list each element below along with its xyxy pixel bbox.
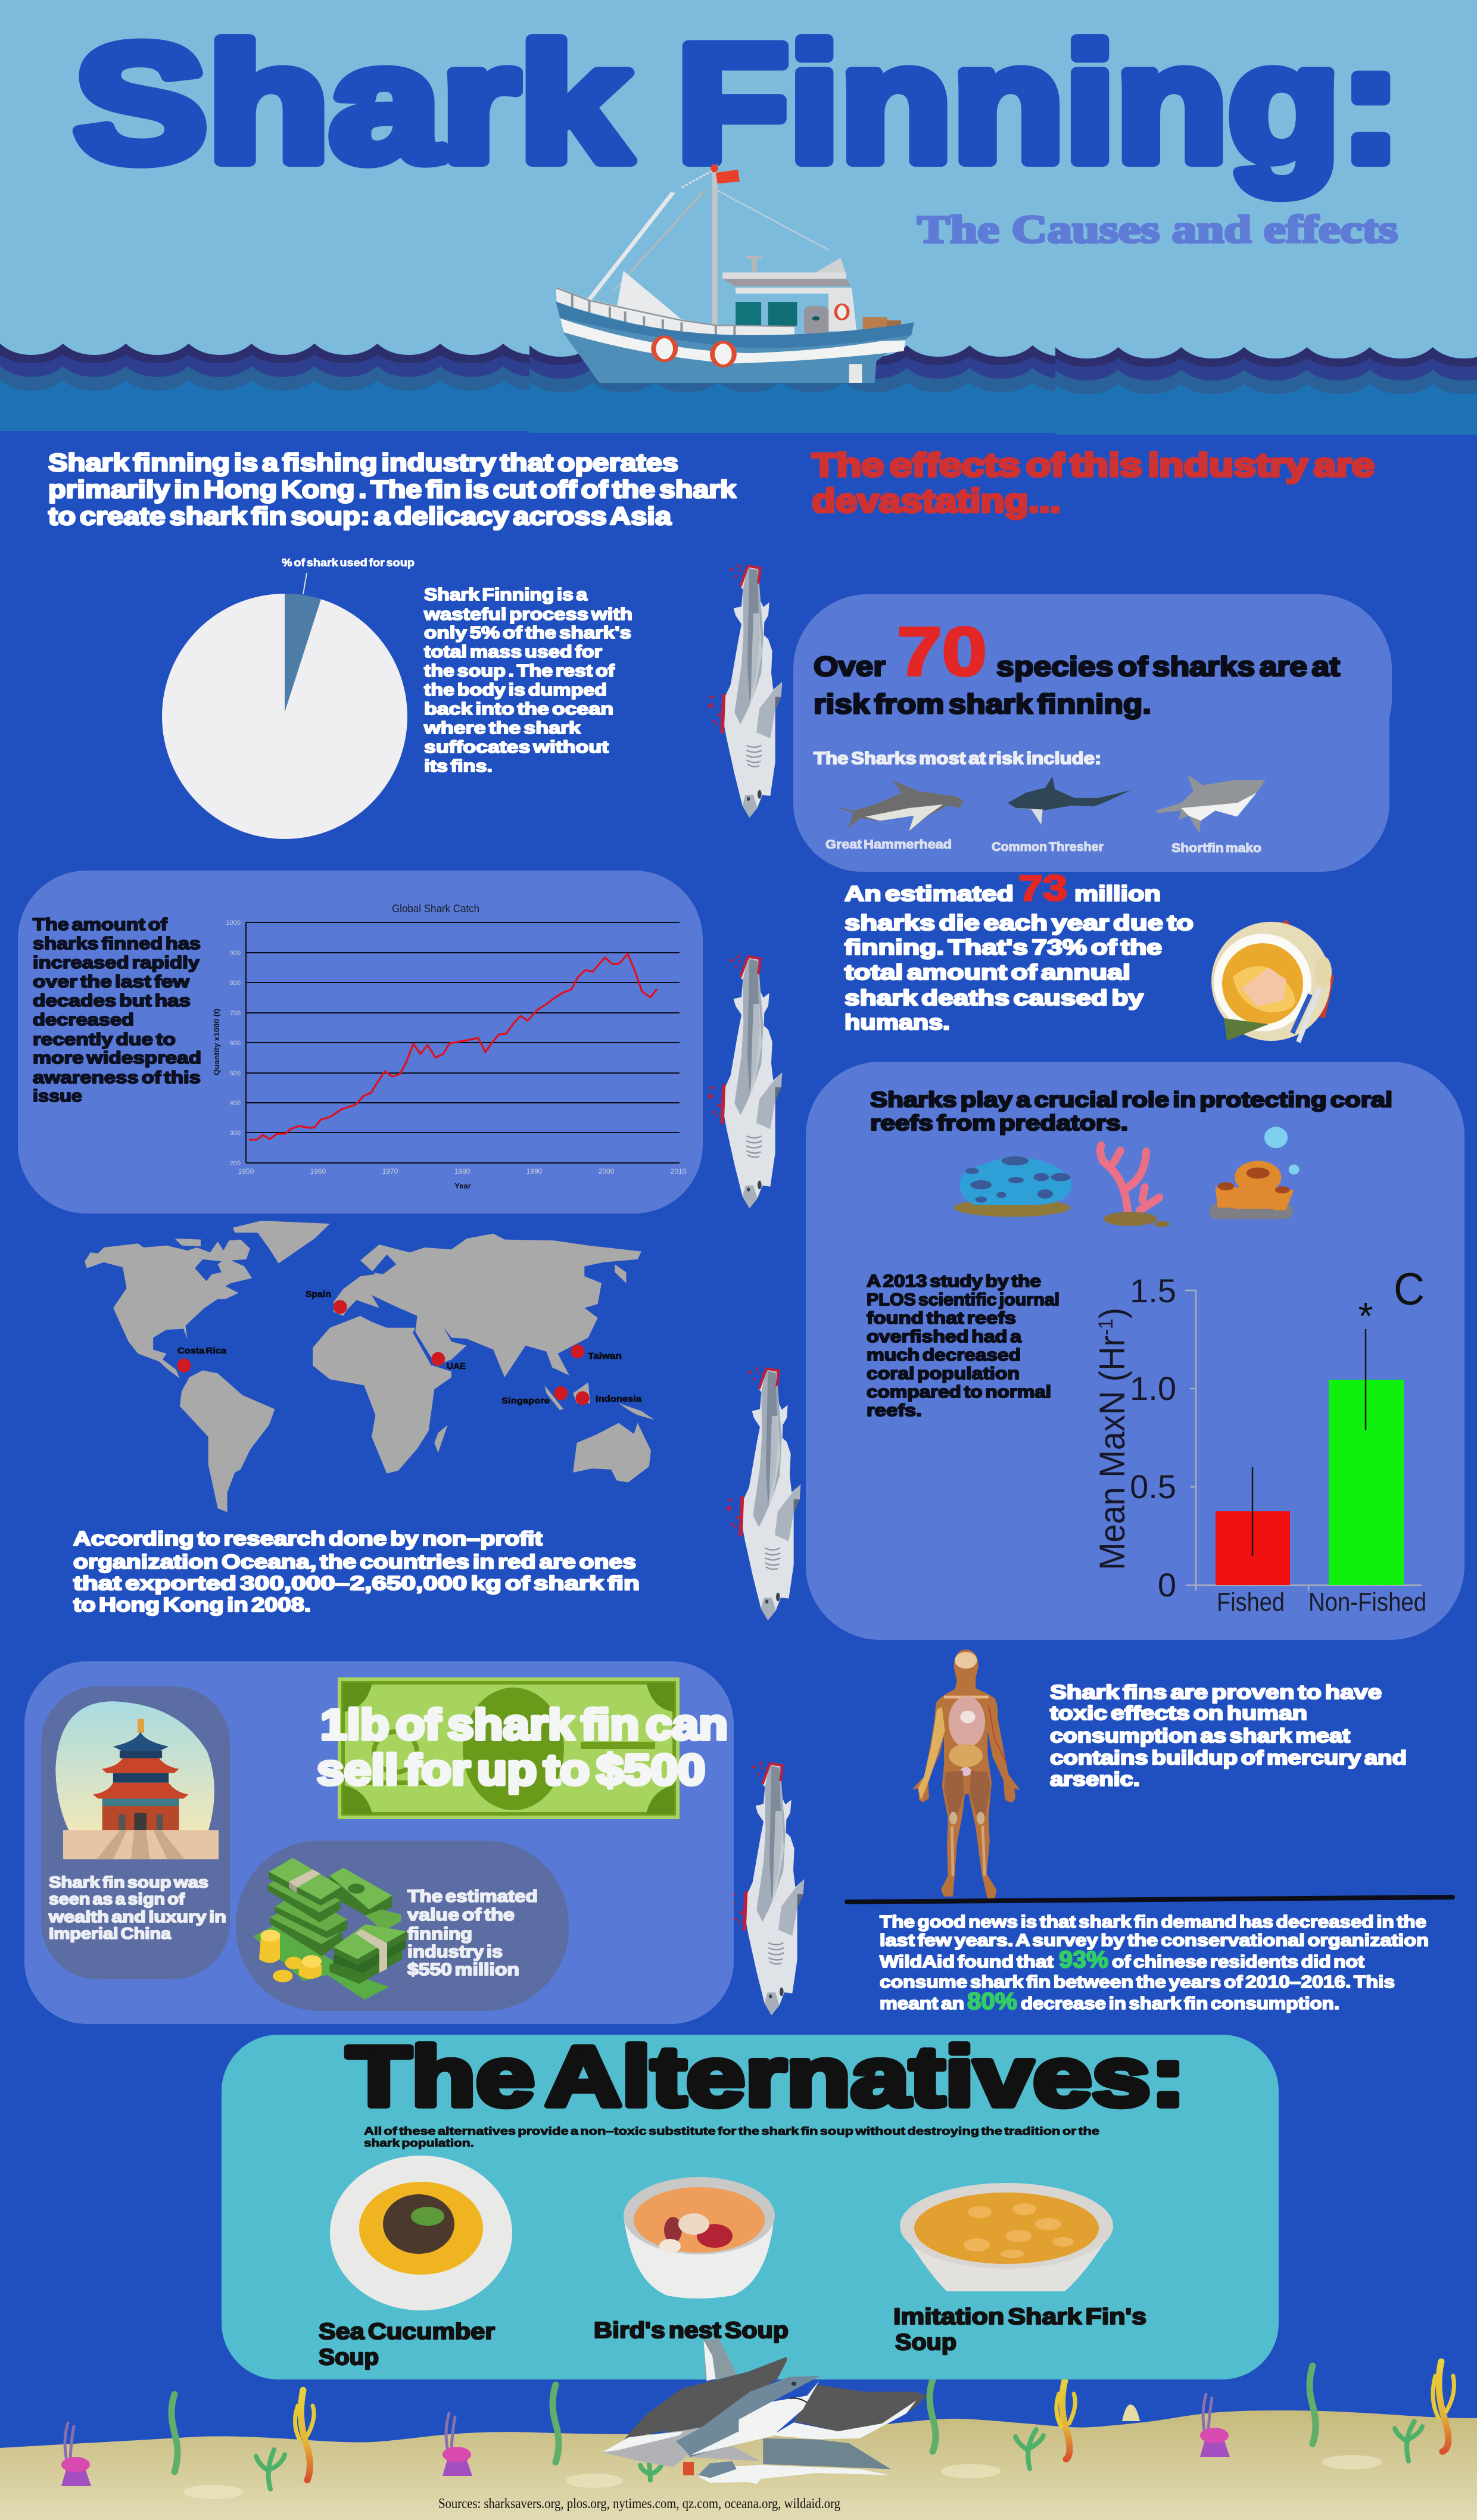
catch text: over the last few: [33, 972, 190, 991]
icon: fishing boat: [556, 164, 914, 383]
sharks at risk heading: The Sharks most at risk include:: [814, 749, 1101, 768]
study text: reefs.: [867, 1401, 922, 1420]
map labels: Spain: [306, 1289, 331, 1299]
soup names: Sea Cucumber: [319, 2319, 495, 2344]
good news text: WildAid found that: [880, 1953, 1054, 1972]
line chart: global shark catch: 400: [230, 1100, 241, 1107]
bar chart: MaxN: C: [1394, 1264, 1425, 1315]
catch text: [33, 915, 201, 1106]
coral heading: reefs from predators.: [870, 1111, 1128, 1135]
shark 1: [709, 564, 782, 818]
catch text: awareness of this: [33, 1068, 201, 1087]
catch text: The amount of: [33, 915, 167, 934]
line chart: global shark catch: 1960: [310, 1167, 326, 1175]
catch text: increased rapidly: [33, 953, 200, 972]
shark names: Great Hammerhead: [825, 838, 952, 852]
catch text: recently due to: [33, 1030, 176, 1049]
70 species text: Over: [814, 651, 886, 682]
coral heading: [870, 1087, 1392, 1135]
icon: imitation shark fin soup: [900, 2183, 1114, 2291]
line chart: global shark catch: 1970: [382, 1167, 398, 1175]
shark 4: [731, 1762, 804, 2015]
study text: PLOS scientific journal: [867, 1290, 1060, 1309]
imperial china text: seen as a sign of: [49, 1890, 185, 1908]
bar chart: MaxN: ): [1092, 1308, 1132, 1319]
panel: coral reefs: [806, 1062, 1464, 1640]
bar chart: MaxN: *: [1358, 1295, 1373, 1337]
heading: effects: The effects of this industry are: [812, 446, 1375, 484]
intro text: [48, 448, 737, 530]
map labels: Singapore: [501, 1396, 550, 1406]
map labels: Taiwan: [588, 1351, 622, 1361]
pie text: back into the ocean: [424, 700, 613, 719]
sources: Sources: sharksavers.org, plos.org, nytimes.com, qz.com, oceana.org, wildaid.org: [438, 2496, 840, 2512]
bar chart: MaxN: 1.5: [1130, 1272, 1176, 1309]
70 species text: species of sharks are at: [996, 651, 1340, 682]
title: [74, 11, 1401, 197]
study text: coral population: [867, 1364, 1020, 1383]
line chart: global shark catch: Global Shark Catch: [392, 903, 479, 915]
toxic text: [1050, 1681, 1407, 1790]
line chart: global shark catch: 500: [230, 1070, 241, 1077]
toxic text: arsenic.: [1050, 1768, 1140, 1790]
line chart: global shark catch: 1980: [454, 1167, 470, 1175]
alternatives title: The Alternatives:: [347, 2029, 1186, 2124]
study text: compared to normal: [867, 1383, 1051, 1402]
73 million text: sharks die each year due to: [845, 910, 1194, 935]
value text: $550 million: [407, 1960, 519, 1979]
shark names: [825, 838, 1261, 855]
line chart: global shark catch: 800: [230, 980, 241, 987]
study text: much decreased: [867, 1346, 1021, 1365]
good news text: last few years. A survey by the conservational organization: [880, 1931, 1429, 1950]
73 million text: An estimated: [845, 881, 1014, 906]
panel: imperial china: [41, 1686, 230, 1979]
bar chart: MaxN: [1092, 1264, 1426, 1617]
intro text: Shark finning is a fishing industry that operates: [48, 448, 678, 476]
pie text: wasteful process with: [423, 605, 632, 624]
map text: According to research done by non–profit: [73, 1527, 543, 1549]
map labels: [177, 1289, 642, 1406]
line chart: global shark catch: 700: [230, 1010, 241, 1017]
bar chart: MaxN: -1: [1095, 1319, 1117, 1336]
icons: coral: [953, 1127, 1300, 1227]
soup names: Bird's nest Soup: [594, 2318, 789, 2343]
imperial china text: Imperial China: [49, 1925, 172, 1942]
good news text: consume shark fin between the years of 2010–2016. This: [880, 1973, 1395, 1992]
pie text: its fins.: [424, 757, 493, 776]
soup names: Soup: [895, 2330, 956, 2355]
bill text: 1lb of shark fin can: [320, 1701, 728, 1749]
sky band: [0, 0, 1477, 381]
good news text: The good news is that shark fin demand has decreased in the: [880, 1913, 1426, 1932]
waves: [0, 344, 1477, 435]
icon: sea cucumber soup: [330, 2156, 512, 2310]
70 species text: 70: [897, 613, 987, 690]
study text: A 2013 study by the: [867, 1272, 1041, 1291]
map text: to Hong Kong in 2008.: [73, 1593, 311, 1615]
bar chart: MaxN: Non-Fished: [1308, 1588, 1426, 1617]
study text: found that reefs: [867, 1309, 1016, 1328]
icon: dollar bill: [338, 1677, 680, 1819]
heading: effects: devastating...: [812, 482, 1061, 519]
imperial china text: wealth and luxury in: [48, 1908, 226, 1926]
icon: money stacks: [253, 1858, 407, 2000]
pie text: where the shark: [423, 719, 581, 738]
line chart: global shark catch: 1950: [238, 1167, 254, 1175]
catch text: more widespread: [33, 1049, 201, 1068]
73 million text: finning. That's 73% of the: [845, 935, 1162, 959]
panel: shark catch: [18, 871, 703, 1214]
73 million text: [845, 868, 1194, 1034]
icon: bird's nest soup: [624, 2177, 775, 2298]
good news text: meant an: [880, 1994, 964, 2013]
map labels: Costa Rica: [177, 1346, 227, 1356]
world map: [85, 1221, 655, 1512]
toxic text: contains buildup of mercury and: [1050, 1746, 1407, 1769]
shark names: Common Thresher: [992, 840, 1104, 854]
value text: value of the: [407, 1905, 515, 1925]
plants: kelp and anemones: [65, 2362, 1454, 2489]
map text: that exported 300,000–2,650,000 kg of shark fin: [73, 1572, 640, 1594]
pie text: Shark Finning is a: [424, 585, 588, 604]
good news text: [880, 1913, 1429, 2014]
catch text: sharks finned has: [33, 934, 201, 953]
panel: industry value: [236, 1841, 569, 2011]
good news text: of chinese residents did not: [1112, 1953, 1364, 1972]
73 million text: 73: [1018, 868, 1067, 908]
panel: 70 species: [793, 594, 1392, 872]
pie text: suffocates without: [424, 738, 609, 757]
line chart: global shark catch: 900: [230, 950, 241, 957]
map labels: UAE: [447, 1361, 466, 1371]
bill text: [317, 1701, 728, 1794]
icon: shark group: [602, 2338, 927, 2484]
title: Shark: [74, 11, 631, 197]
pie chart: [162, 557, 415, 839]
70 species text: [814, 613, 1340, 719]
pie text: the soup . The rest of: [424, 662, 615, 681]
value text: industry is: [407, 1942, 503, 1961]
subtitle: The Causes and effects: [917, 208, 1398, 251]
pie text: [423, 585, 632, 776]
value text: finning: [407, 1925, 472, 1944]
toxic text: toxic effects on human: [1050, 1702, 1307, 1724]
line chart: global shark catch: 200: [230, 1160, 241, 1167]
heading: effects: [812, 446, 1375, 519]
icons: three sharks: [834, 775, 1266, 834]
line chart: global shark catch: Quantity x1000 (t): [212, 1009, 221, 1075]
alternatives subtext: shark population.: [364, 2137, 474, 2149]
line chart: global shark catch: 2000: [599, 1167, 615, 1175]
alternatives subtext: [364, 2125, 1099, 2149]
panel: money: [24, 1661, 734, 2024]
73 million text: shark deaths caused by: [845, 985, 1143, 1010]
map labels: Indonesia: [596, 1394, 642, 1404]
imperial china text: Shark fin soup was: [49, 1873, 208, 1891]
icon: temple: [55, 1701, 219, 1859]
map text: organization Oceana, the countries in red are ones: [73, 1551, 636, 1573]
shark 2: [709, 955, 782, 1208]
line chart: global shark catch: Year: [454, 1181, 471, 1190]
toxic text: consumption as shark meat: [1050, 1724, 1350, 1746]
icon: human anatomy: [912, 1649, 1020, 1900]
imperial china text: [48, 1873, 226, 1942]
soup names: Imitation Shark Fin's: [893, 2304, 1146, 2329]
coral heading: Sharks play a crucial role in protecting coral: [870, 1087, 1392, 1112]
good news text: decrease in shark fin consumption.: [1021, 1994, 1339, 2013]
bar chart: MaxN: 1.0: [1130, 1370, 1176, 1407]
study text: [867, 1272, 1060, 1420]
bar chart: MaxN: Mean MaxN (Hr: [1092, 1318, 1132, 1570]
73 million text: million: [1074, 881, 1161, 906]
line chart: global shark catch: 2010: [671, 1167, 687, 1175]
catch text: decades but has: [33, 991, 191, 1011]
alternatives subtext: All of these alternatives provide a non–toxic substitute for the shark fin soup without destroying the tradition or the: [364, 2125, 1099, 2137]
73 million text: total amount of annual: [845, 960, 1130, 984]
soup names: Soup: [319, 2345, 379, 2370]
seabed: [0, 2362, 1477, 2520]
pie text: the body is dumped: [424, 681, 607, 700]
value text: [407, 1887, 538, 1979]
shark 3: [727, 1367, 800, 1620]
pie chart: % of shark used for soup: [282, 557, 415, 569]
intro text: to create shark fin soup: a delicacy across Asia: [48, 502, 672, 530]
study text: overfished had a: [867, 1327, 1022, 1346]
title: Finning:: [677, 11, 1401, 197]
catch text: decreased: [33, 1011, 134, 1030]
map text: [73, 1527, 640, 1615]
line chart: global shark catch: 1000: [226, 919, 241, 927]
bar chart: MaxN: 0.5: [1130, 1468, 1176, 1505]
good news text: 93%: [1059, 1947, 1108, 1973]
line chart: global shark catch: 600: [230, 1040, 241, 1047]
line chart: global shark catch: 300: [230, 1130, 241, 1137]
soup names: [319, 2304, 1146, 2370]
bill text: sell for up to $500: [317, 1746, 705, 1794]
70 species text: risk from shark finning.: [814, 688, 1151, 719]
toxic text: Shark fins are proven to have: [1050, 1681, 1382, 1703]
pie text: total mass used for: [424, 643, 602, 662]
value text: The estimated: [407, 1887, 538, 1906]
pie text: only 5% of the shark's: [424, 623, 631, 643]
line chart: global shark catch: 1990: [526, 1167, 543, 1175]
icon: soup plate: [1211, 920, 1334, 1042]
line chart: global shark catch: [212, 903, 687, 1190]
catch text: issue: [33, 1087, 82, 1106]
73 million text: humans.: [845, 1010, 950, 1034]
panel: alternatives: [222, 2029, 1279, 2379]
shark names: Shortfin mako: [1171, 841, 1261, 855]
bar chart: MaxN: 0: [1158, 1566, 1176, 1604]
good news text: 80%: [967, 1988, 1017, 2014]
intro text: primarily in Hong Kong . The fin is cut off of the shark: [48, 475, 737, 503]
bar chart: MaxN: Fished: [1217, 1588, 1285, 1617]
